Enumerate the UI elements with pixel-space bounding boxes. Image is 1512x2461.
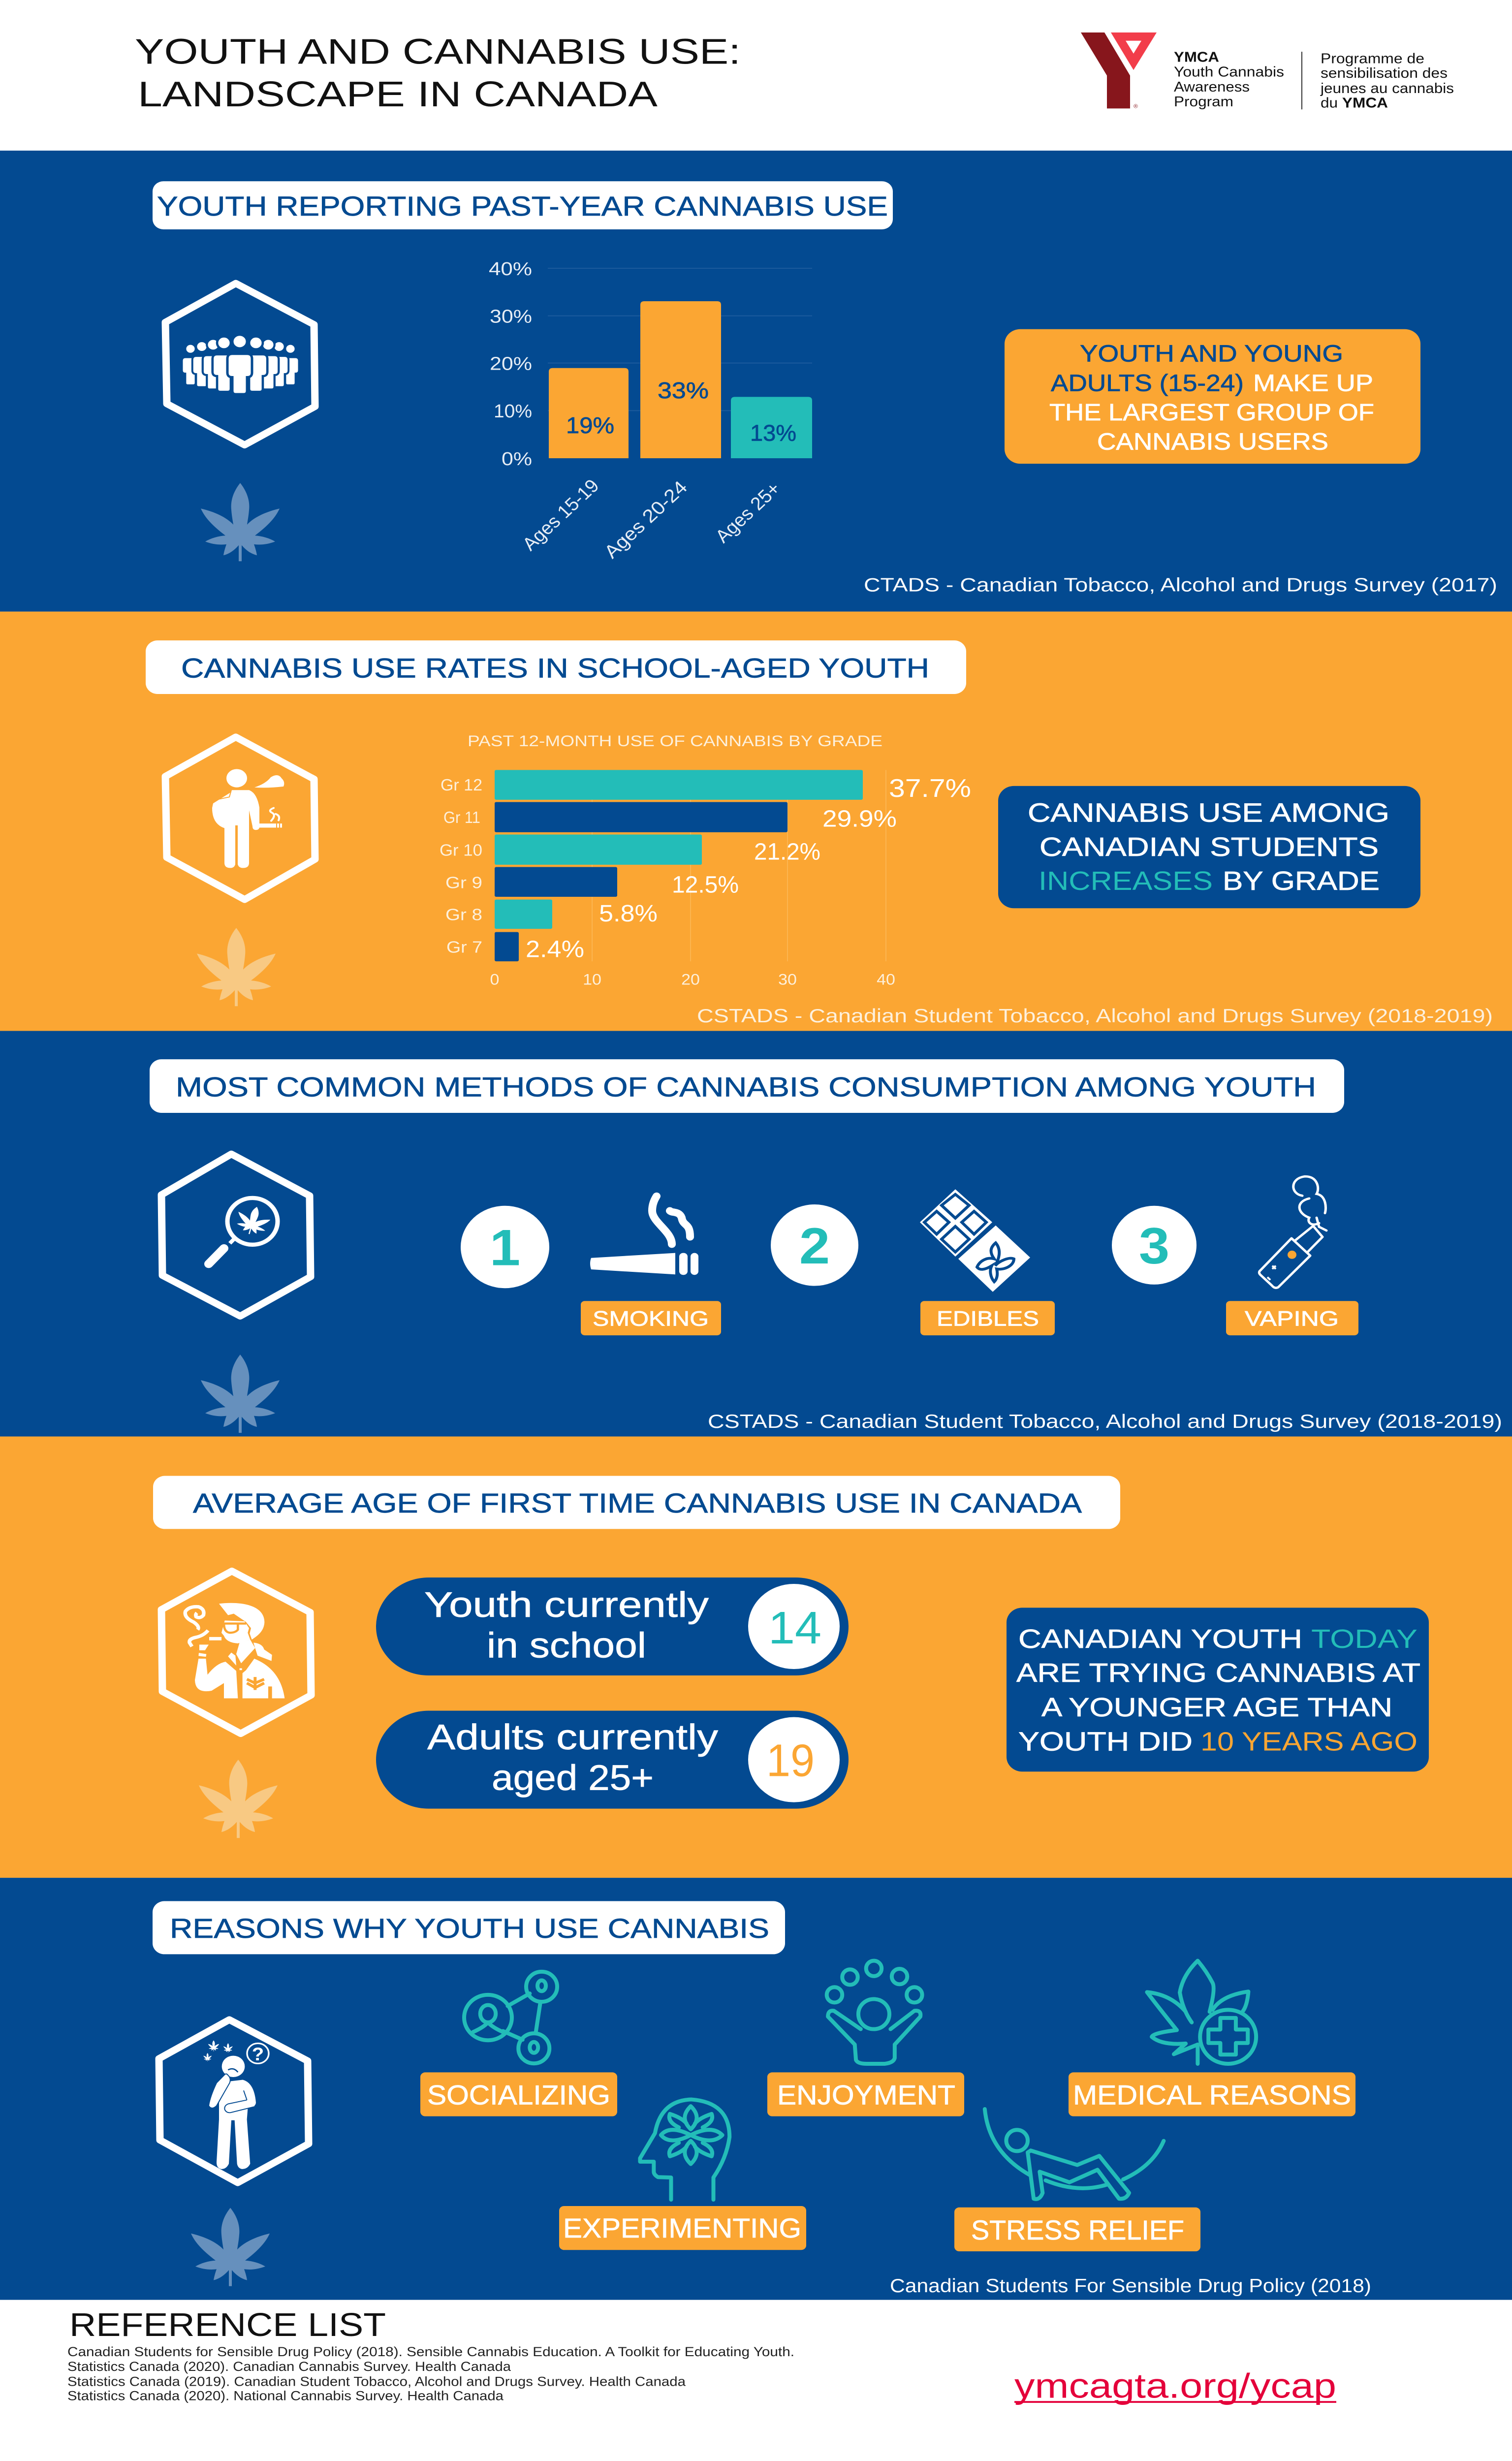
logo: YMCA Youth Cannabis Awareness Program: Awareness [1174, 79, 1250, 95]
icon: cannabis leaf [201, 1355, 280, 1433]
heading [150, 1059, 1344, 1113]
panel: youth reporting past-year cannabis use [0, 151, 1512, 612]
horizontal bar chart: 29.9% [822, 805, 897, 832]
bar chart [489, 258, 812, 563]
horizontal bar chart: 0 [490, 971, 499, 988]
reason: medical reasons: MEDICAL REASONS [1073, 2080, 1351, 2111]
horizontal bar chart: Gr 9 [445, 874, 482, 892]
bar chart: Ages 20-24 [600, 477, 692, 563]
stat: adults currently aged 25+: 19 [766, 1735, 815, 1786]
reason: experimenting [559, 2099, 806, 2250]
horizontal bar chart: Gr 10 [440, 841, 482, 859]
callout: BY GRADE [1223, 866, 1380, 896]
label: vaping: VAPING [1245, 1307, 1339, 1330]
horizontal bar chart: 37.7% [889, 774, 971, 803]
title [135, 32, 741, 114]
heading: YOUTH REPORTING PAST-YEAR CANNABIS USE [157, 191, 888, 222]
horizontal bar chart: 40 [877, 971, 895, 988]
reason: enjoyment [767, 1961, 964, 2116]
logo: YMCA Youth Cannabis Awareness Program: Programme de [1321, 51, 1424, 66]
callout: CANADIAN YOUTH [1018, 1624, 1302, 1654]
reference list text: Statistics Canada (2020). Canadian Cannabis Survey. Health Canada [67, 2359, 511, 2374]
stat: youth currently in school: in school [487, 1625, 646, 1665]
panel: most common methods of cannabis consumption [0, 1031, 1512, 1437]
icon: crowd in hexagon [165, 284, 315, 445]
logo: YMCA Youth Cannabis Awareness Program: Youth Cannabis [1174, 64, 1284, 80]
horizontal bar chart: Gr 8 [445, 906, 482, 924]
bar chart: 13% [750, 420, 796, 446]
reference list heading: REFERENCE LIST [69, 2306, 386, 2343]
reference list text: Statistics Canada (2019). Canadian Student Tobacco, Alcohol and Drugs Survey. Health Canada [67, 2374, 686, 2389]
title: YOUTH AND CANNABIS USE: [135, 32, 741, 71]
heading [153, 1476, 1120, 1529]
logo: YMCA Youth Cannabis Awareness Program: Program [1174, 94, 1233, 110]
horizontal bar chart: Gr 11 [443, 809, 480, 827]
callout: CANADIAN STUDENTS [1040, 832, 1379, 862]
logo: YMCA Youth Cannabis Awareness Program: du YMCA [1321, 95, 1388, 111]
bar chart: Ages 25+ [711, 478, 785, 547]
heading: AVERAGE AGE OF FIRST TIME CANNABIS USE IN CANADA [193, 1488, 1082, 1518]
bar chart: 40% [489, 258, 532, 280]
bar chart: 20% [490, 353, 532, 374]
bar chart: 30% [490, 306, 532, 327]
heading [153, 181, 893, 229]
logo: YMCA Youth Cannabis Awareness Program: sensibilisation des [1321, 65, 1448, 81]
panel: cannabis use rates in school-aged youth [0, 612, 1512, 1031]
horizontal bar chart: 2.4% [526, 936, 584, 962]
callout: THE LARGEST GROUP OF [1049, 399, 1374, 425]
horizontal bar chart: 5.8% [599, 900, 658, 927]
bar chart: 10% [494, 401, 532, 422]
callout: MAKE UP [1253, 370, 1373, 396]
bar chart: 19% [566, 412, 614, 438]
bar chart: 0% [502, 448, 532, 470]
icon: joint [590, 1196, 698, 1275]
callout: TODAY [1311, 1624, 1418, 1654]
callout: 10 YEARS AGO [1200, 1726, 1418, 1756]
callout: ARE TRYING CANNABIS AT [1016, 1658, 1420, 1688]
icon: cannabis leaf [191, 2208, 270, 2286]
callout [1005, 329, 1420, 464]
stat: youth currently in school [376, 1578, 849, 1675]
reason: enjoyment: ENJOYMENT [777, 2080, 955, 2111]
callout: YOUTH AND YOUNG [1080, 340, 1343, 367]
logo: YMCA Youth Cannabis Awareness Program [1081, 32, 1454, 111]
icon: thinking person in hexagon [159, 2019, 309, 2183]
bar chart: 33% [658, 378, 709, 404]
stat: adults currently aged 25+: Adults currently [427, 1717, 718, 1757]
rank 3: 3 [1139, 1217, 1169, 1274]
horizontal bar chart: 30 [778, 971, 797, 988]
icon: cannabis leaf [201, 483, 280, 561]
heading: MOST COMMON METHODS OF CANNABIS CONSUMPTION AMONG YOUTH [176, 1072, 1316, 1103]
callout: A YOUNGER AGE THAN [1041, 1692, 1392, 1722]
label: edibles: EDIBLES [937, 1307, 1039, 1330]
callout: CANNABIS USERS [1097, 428, 1328, 455]
horizontal bar chart: Gr 12 [441, 776, 482, 794]
source: CSTADS - Canadian Student Tobacco, Alcohol and Drugs Survey (2018-2019) [697, 1005, 1493, 1026]
heading [153, 1901, 785, 1954]
label: smoking: SMOKING [593, 1307, 709, 1330]
logo: YMCA Youth Cannabis Awareness Program: jeunes au cannabis [1320, 81, 1454, 96]
chart title: PAST 12-MONTH USE OF CANNABIS BY GRADE [468, 732, 882, 750]
source: CTADS - Canadian Tobacco, Alcohol and Drugs Survey (2017) [864, 574, 1497, 596]
logo: YMCA Youth Cannabis Awareness Program: ® [1134, 104, 1138, 109]
panel: reasons why youth use cannabis [0, 1878, 1512, 2300]
heading: REASONS WHY YOUTH USE CANNABIS [170, 1914, 769, 1944]
horizontal bar chart: Gr 7 [446, 939, 482, 956]
source: CSTADS - Canadian Student Tobacco, Alcohol and Drugs Survey (2018-2019) [708, 1410, 1502, 1432]
rank 2 [771, 1204, 858, 1286]
horizontal bar chart: 20 [681, 971, 700, 988]
reason: medical reasons [1069, 1961, 1355, 2116]
reason: socializing: SOCIALIZING [427, 2080, 610, 2111]
stat: adults currently aged 25+ [376, 1711, 849, 1809]
rank 2: 2 [799, 1217, 830, 1274]
callout: INCREASES [1039, 866, 1213, 896]
callout: CANNABIS USE AMONG [1028, 797, 1389, 827]
icon: thinking person in hexagon: ? [252, 2044, 264, 2065]
icon: student smoking in hexagon [165, 737, 315, 900]
callout [998, 786, 1420, 908]
horizontal bar chart: 12.5% [672, 871, 739, 898]
label: smoking [581, 1301, 721, 1335]
bar chart: Ages 15-19 [518, 475, 603, 555]
callout: ADULTS (15-24) [1051, 370, 1244, 396]
label: vaping [1226, 1301, 1358, 1335]
heading: CANNABIS USE RATES IN SCHOOL-AGED YOUTH [181, 653, 929, 684]
reference list text: Canadian Students for Sensible Drug Policy (2018). Sensible Cannabis Education. A Toolkit for Educating Youth. [67, 2344, 794, 2359]
callout: YOUTH DID [1018, 1726, 1193, 1756]
logo: YMCA Youth Cannabis Awareness Program: YMCA [1174, 50, 1219, 65]
website link: ymcagta.org/ycap [1014, 2366, 1336, 2405]
reason: socializing [420, 1972, 617, 2116]
icon: vape pen [1259, 1176, 1326, 1288]
stat: youth currently in school: 14 [768, 1603, 821, 1653]
panel: average age of first time cannabis use [0, 1437, 1512, 1878]
title: LANDSCAPE IN CANADA [138, 74, 658, 114]
callout [1007, 1608, 1429, 1771]
reason: stress relief: STRESS RELIEF [971, 2215, 1184, 2245]
rank 3 [1112, 1206, 1197, 1285]
icon: magnifying glass in hexagon [161, 1154, 311, 1316]
label: edibles [920, 1301, 1055, 1335]
reason: stress relief [954, 2109, 1200, 2251]
icon: cannabis leaf [199, 1760, 278, 1838]
reference list text [67, 2344, 794, 2403]
icon: smoker in hexagon [161, 1571, 311, 1734]
rank 1: 1 [490, 1219, 520, 1276]
heading [146, 640, 966, 694]
rank 1 [461, 1206, 549, 1288]
horizontal bar chart: 21.2% [754, 838, 820, 865]
horizontal bar chart [440, 770, 971, 988]
horizontal bar chart: 10 [583, 971, 601, 988]
reference list text: Statistics Canada (2020). National Cannabis Survey. Health Canada [67, 2388, 504, 2403]
source: Canadian Students For Sensible Drug Policy (2018) [890, 2274, 1371, 2296]
icon: cannabis leaf [197, 928, 276, 1006]
reason: experimenting: EXPERIMENTING [563, 2213, 801, 2244]
stat: adults currently aged 25+: aged 25+ [492, 1758, 654, 1798]
icon: edibles chocolate bar [920, 1189, 1030, 1292]
stat: youth currently in school: Youth currently [424, 1584, 709, 1624]
